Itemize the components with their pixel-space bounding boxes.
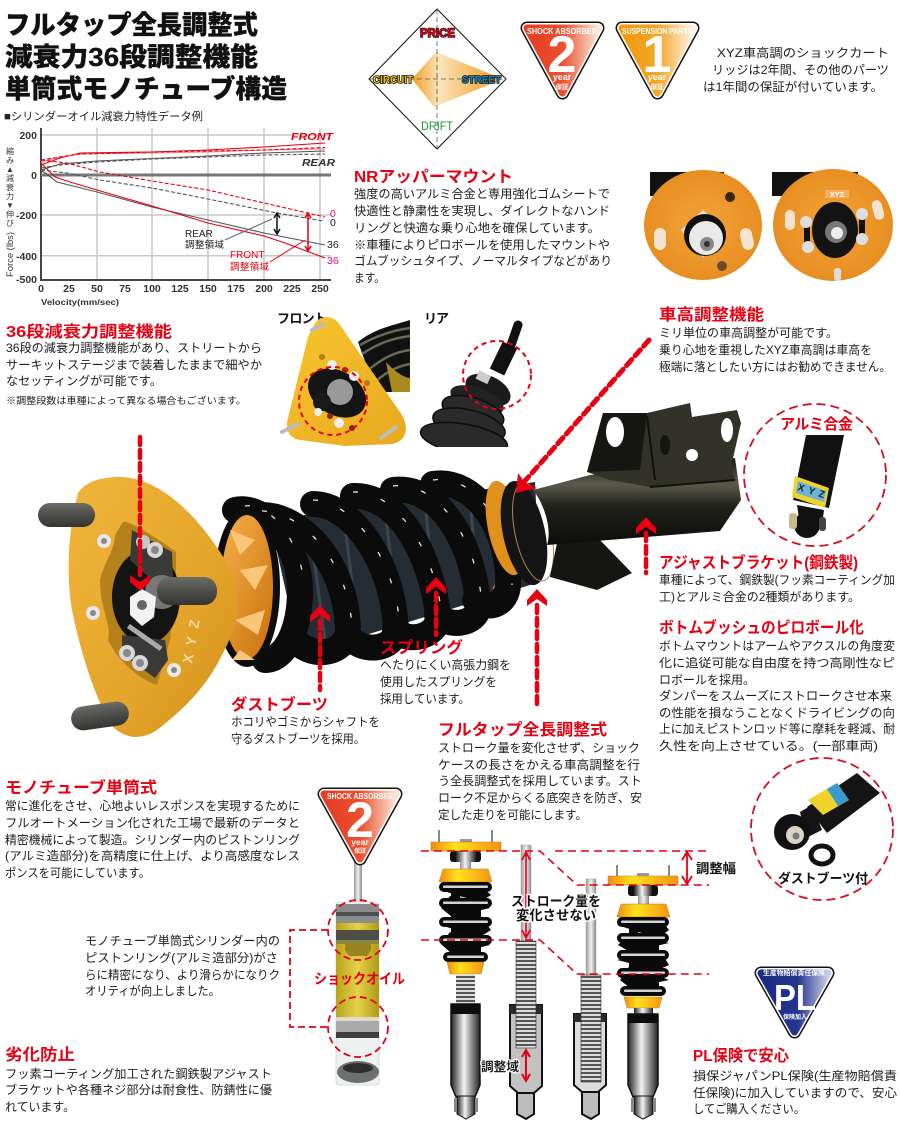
strut: plate opening: [100, 522, 176, 685]
inset: aluminium alloy bracket: [744, 404, 886, 546]
text block: PL insurance: [693, 1046, 897, 1116]
text block: NR upper mount: 快適性と静粛性を実現し、ダイレクトなハンド: [354, 203, 610, 218]
text block: NR upper mount: ゴムブッシュタイプ、ノーマルタイプなどがあり: [354, 253, 612, 268]
label: adjustment range: 調整域: [481, 1059, 519, 1074]
text block: NR upper mount: リングと快適な乗り心地を確保しています。: [354, 220, 600, 235]
text block: monotube: [5, 778, 300, 880]
photo: rear mount detail: [410, 311, 531, 465]
inset: shock with dust boot: ダストブーツ付: [778, 871, 868, 886]
strut: top plate: [69, 477, 238, 737]
y axis numbers: -400: [16, 251, 37, 263]
text block: 36 step damping: サーキットステージまで装着したままで細やか: [6, 357, 262, 372]
badge: shock absorber 2 year: 2: [548, 26, 576, 84]
text block: piston ring note: らに精密になり、より滑らかになりク: [85, 968, 280, 982]
badge: suspension parts 1 year: [622, 26, 693, 93]
text block: NR upper mount: NRアッパーマウント: [354, 168, 513, 186]
text block: bottom bush pillow ball: ロボールを採用。: [659, 673, 755, 687]
series labels: 調整領域: [185, 239, 224, 251]
badge: shock absorber on cylinder: 2: [346, 792, 374, 848]
text block: bottom bush pillow ball: 上に加えピストンロッド等に摩耗を軽減、耐: [659, 721, 895, 736]
series labels: FRONT: [291, 132, 334, 143]
text block: adjust bracket: 工)とアルミ合金の2種類があります。: [659, 589, 860, 604]
diamond characteristic chart: CIRCUIT: [373, 75, 413, 86]
label: stroke unchanged: [511, 894, 601, 923]
chart heading: ■シリンダーオイル減衰力特性データ例: [4, 109, 203, 123]
y axis numbers: 0: [31, 170, 37, 182]
x axis numbers: 125: [171, 283, 189, 295]
dashed ride height reference lines: [421, 851, 709, 974]
adjustment width arrow and label: [682, 852, 736, 884]
text block: spring: [380, 638, 511, 706]
photo: upper mount top: [772, 169, 893, 281]
label: stroke unchanged: ストローク量を: [511, 894, 601, 909]
cylinder: detail circles and bracket: [290, 900, 388, 1057]
warranty text: リッジは2年間、その他のパーツ: [712, 63, 889, 77]
text block: full tap: う全長調整式を採用しています。スト: [438, 774, 642, 788]
text block: anti degradation: フッ素コーティング加工された鋼鉄製アジャスト: [5, 1066, 272, 1081]
text block: PL insurance: PL保険で安心: [693, 1046, 789, 1065]
text block: dust boot: 守るダストブーツを採用。: [231, 731, 365, 746]
strut: lower bracket: [550, 537, 632, 590]
text block: monotube: ポンスを可能にしています。: [5, 866, 150, 880]
badge: suspension parts 1 year: 保証: [650, 82, 664, 91]
chart curves: [41, 143, 325, 258]
badge: PL insurance: PL: [774, 977, 816, 1018]
text block: piston ring note: モノチューブ単筒式シリンダー内の: [85, 933, 280, 948]
badge: shock absorber 2 year: SHOCK ABSORBER: [527, 26, 597, 36]
text block: bottom bush pillow ball: [659, 618, 895, 753]
text block: full tap: ストローク量を変化させず、ショック: [438, 740, 640, 755]
panel: damping force chart: [4, 109, 339, 307]
label: front: フロント: [277, 311, 327, 326]
text block: spring: 採用しています。: [380, 692, 470, 706]
strut: front stud: [157, 577, 217, 605]
text block: full tap: ローク不足からくる底突きを防ぎ、安: [438, 790, 642, 805]
text block: bottom bush pillow ball: の性能を損なうことなくドライビングの向: [659, 705, 895, 720]
diamond characteristic chart: STREET: [462, 75, 501, 86]
photo: upper mount top: XYZ: [830, 190, 845, 199]
y axis numbers: -200: [16, 210, 37, 222]
red arrow: adjust bracket: [636, 517, 656, 573]
badge: PL insurance: 生産物賠償責任保険: [763, 968, 826, 977]
badge: shock absorber 2 year: [527, 26, 598, 93]
text block: adjust bracket: 車種によって、鋼鉄製(フッ素コーティング加: [659, 572, 895, 587]
x axis title: Velocity(mm/sec): [41, 297, 119, 307]
text block: full tap: フルタップ全長調整式: [438, 720, 607, 739]
red arrow: damping adjuster: [130, 437, 150, 591]
x axis numbers: 0: [38, 283, 44, 295]
red arrow: ride height: [516, 340, 649, 493]
text block: 36 step damping: なセッティングが可能です。: [6, 373, 162, 388]
text block: bottom bush pillow ball: 久性を向上させている。(一部車両): [659, 738, 878, 753]
red arrow: spring: [426, 577, 446, 635]
text block: anti degradation: 劣化防止: [5, 1046, 75, 1064]
diagram: coilover short: [608, 865, 678, 1119]
text block: PL insurance: 損保ジャパンPL保険(生産物賠償責: [693, 1068, 897, 1083]
strut: upper stud: [38, 503, 95, 527]
badge: shock absorber on cylinder: year: [351, 837, 369, 847]
text block: anti degradation: ブラケットや各種ネジ部分は耐食性、防錆性に優: [5, 1082, 272, 1097]
text block: full tap: [438, 720, 642, 822]
text block: NR upper mount: 強度の高いアルミ合金と専用強化ゴムシートで: [354, 186, 610, 201]
text block: bottom bush pillow ball: 化に追従可能な自由度を持つ高剛性なピ: [659, 655, 895, 670]
y axis title: 伸: [6, 209, 14, 219]
badge: suspension parts 1 year: year: [648, 72, 667, 82]
text block: 36 step damping: ※調整段数は車種によって異なる場合もございます。: [6, 394, 246, 407]
diagram: coilover long: [431, 830, 501, 1119]
strut: plate logo: XYZ: [179, 618, 203, 665]
x axis numbers: 25: [63, 283, 75, 295]
series labels: 36: [327, 255, 339, 267]
diamond characteristic chart: DRIFT: [421, 119, 454, 133]
title: 減衰力36段調整機能: [5, 42, 258, 72]
x axis numbers: 100: [143, 283, 161, 295]
red arrow: dust boot: [310, 605, 330, 690]
inset: aluminium alloy bracket: アルミ合金: [780, 415, 853, 433]
diagram: cutaway long: [510, 845, 542, 1119]
text block: bottom bush pillow ball: ボトムブッシュのピロボール化: [659, 618, 864, 637]
strut: spring inner body: [270, 482, 540, 655]
y axis title: 衰: [6, 182, 14, 192]
x axis numbers: 50: [91, 283, 103, 295]
badge: shock absorber on cylinder: [324, 791, 396, 859]
series labels: 0: [330, 208, 336, 220]
strut: main tube: [533, 458, 741, 545]
strut: lower stud: [70, 700, 130, 732]
y axis numbers: [16, 130, 37, 286]
strut: adjuster collar: [478, 478, 532, 578]
warranty text: XYZ車高調のショックカート: [717, 46, 889, 60]
y axis title: み: [6, 156, 14, 165]
strut: plate screws: [97, 534, 111, 548]
text block: 36 step damping: [6, 322, 262, 407]
text block: ride height: ミリ単位の車高調整が可能です。: [659, 325, 838, 340]
x axis numbers: 150: [199, 283, 217, 295]
y axis numbers: 200: [19, 130, 37, 142]
cylinder: oil label: ショックオイル: [314, 971, 405, 988]
label: stroke unchanged: 変化させない: [516, 908, 596, 923]
y axis title: ▲: [6, 165, 14, 174]
x axis numbers: 225: [283, 283, 301, 295]
series labels: FRONT: [230, 250, 264, 261]
strut: upper bracket: [587, 403, 741, 487]
y axis title: 減: [6, 173, 14, 183]
text block: PL insurance: 任保険)に加入していますので、安心: [693, 1086, 897, 1100]
text block: NR upper mount: ます。: [354, 271, 385, 285]
chart grid: [41, 128, 331, 280]
warranty text: は1年間の保証が付いています。: [703, 79, 883, 94]
strut: coil spring: [235, 483, 508, 660]
text block: spring: スプリング: [380, 638, 463, 657]
text block: ride height: 極端に落としたい方にはお勧めできません。: [659, 359, 891, 374]
badge: shock absorber on cylinder: SHOCK ABSORBER: [327, 791, 393, 801]
inset: aluminium alloy bracket: XYZ: [796, 482, 826, 501]
series labels: [185, 132, 339, 273]
text block: monotube: モノチューブ単筒式: [5, 778, 157, 797]
badge: PL insurance: [761, 968, 828, 1032]
y axis title: Force (lbs): [5, 232, 15, 277]
text block: 36 step damping: 36段の減衰力調整機能があり、ストリートから: [6, 340, 262, 355]
text block: ride height: 車高調整機能: [659, 305, 764, 324]
y axis title: 縮: [6, 146, 14, 156]
text block: NR upper mount: [354, 168, 612, 285]
title: [5, 10, 287, 104]
text block: piston ring note: ピストンリング(アルミ造部分)がさ: [85, 950, 278, 965]
x axis numbers: 200: [255, 283, 273, 295]
text block: monotube: (アルミ造部分)を高精度に仕上げ、より高感度なレス: [5, 848, 300, 863]
text block: anti degradation: [5, 1046, 272, 1114]
strut: spring highlights: [245, 479, 512, 628]
y axis title: ▼: [6, 201, 14, 210]
inset: shock with dust boot: [751, 758, 893, 900]
text block: bottom bush pillow ball: ボトムマウントはアームやアクスルの角度変: [659, 638, 895, 653]
label: rear: リア: [424, 311, 449, 326]
text block: adjust bracket: アジャストブラケット(鋼鉄製): [659, 553, 858, 572]
adjust range arrow: [522, 1050, 530, 1081]
chart axes: [41, 128, 331, 280]
y axis title: [5, 146, 15, 277]
text block: full tap: 定した走りを可能にします。: [438, 808, 587, 822]
text block: spring: へたりにくい高張力鋼を: [380, 658, 511, 672]
badge: shock absorber 2 year: year: [553, 72, 572, 82]
chart range arrows: [225, 213, 311, 262]
strut: mount rear disc: [214, 507, 280, 667]
cylinder: body: [336, 902, 379, 1085]
title: 単筒式モノチューブ構造: [5, 74, 287, 104]
title: フルタップ全長調整式: [5, 10, 258, 40]
x axis numbers: 250: [311, 283, 329, 295]
y axis numbers: -500: [16, 274, 37, 286]
diagram: cutaway short: [574, 879, 606, 1119]
text block: ride height: [659, 305, 891, 374]
series labels: 調整領域: [230, 261, 269, 273]
text block: 36 step damping: 36段減衰力調整機能: [6, 322, 172, 341]
text block: full tap: ケースの長さをかえる車高調整を行: [438, 758, 640, 772]
y axis title: び: [6, 219, 14, 228]
badge: shock absorber on cylinder: 保証: [354, 847, 366, 855]
badge: suspension parts 1 year: SUSPENSION PARTS: [622, 27, 693, 36]
series labels: 36: [327, 239, 339, 251]
diamond characteristic chart: PRICE: [420, 26, 455, 40]
text block: adjust bracket: [659, 553, 895, 604]
series labels: REAR: [302, 158, 336, 169]
x axis numbers: [38, 283, 329, 295]
text block: spring: 使用したスプリングを: [380, 674, 497, 689]
text block: anti degradation: れています。: [5, 1100, 75, 1114]
badge: PL insurance: 保険加入: [783, 1013, 807, 1021]
photo: front mount detail: [277, 311, 410, 446]
text block: PL insurance: してご購入ください。: [693, 1101, 805, 1116]
cutaway shock cylinder: [290, 855, 405, 1085]
text block: dust boot: ダストブーツ: [231, 695, 328, 714]
cylinder: rod: [354, 855, 362, 903]
text block: bottom bush pillow ball: ダンパーをスムーズにストロークさせ本来: [659, 688, 892, 703]
y axis title: 力: [6, 191, 14, 201]
text block: piston ring note: [85, 933, 280, 998]
badge: suspension parts 1 year: 1: [643, 26, 671, 84]
adjustment width arrow and label: 調整幅: [696, 861, 736, 876]
main strut photo: [38, 403, 741, 737]
text block: piston ring note: オリティが向上しました。: [85, 983, 220, 998]
text block: ride height: 乗り心地を重視したXYZ車高調は車高を: [659, 343, 872, 357]
badge: shock absorber 2 year: 保証: [556, 82, 569, 91]
text block: monotube: 常に進化をさせ、心地よいレスポンスを実現するために: [5, 798, 300, 813]
series labels: 0: [330, 217, 336, 229]
series labels: REAR: [185, 229, 213, 240]
text block: monotube: フルオートメーション化された工場で最新のデータと: [5, 815, 300, 830]
text block: dust boot: ホコリやゴミからシャフトを: [231, 714, 380, 729]
red arrow: full tap adjustment: [527, 589, 547, 705]
photo: upper mount underside: [644, 170, 762, 280]
text block: NR upper mount: ※車種によりピロボールを使用したマウントや: [354, 237, 610, 252]
diamond characteristic chart: [369, 9, 506, 149]
stroke arrow: [522, 852, 530, 938]
warranty text: [703, 46, 889, 94]
text block: dust boot: [231, 695, 380, 746]
x axis numbers: 175: [227, 283, 245, 295]
x axis numbers: 75: [119, 283, 131, 295]
text block: monotube: 精密機械によって製造。シリンダー内のピストンリング: [5, 832, 300, 847]
